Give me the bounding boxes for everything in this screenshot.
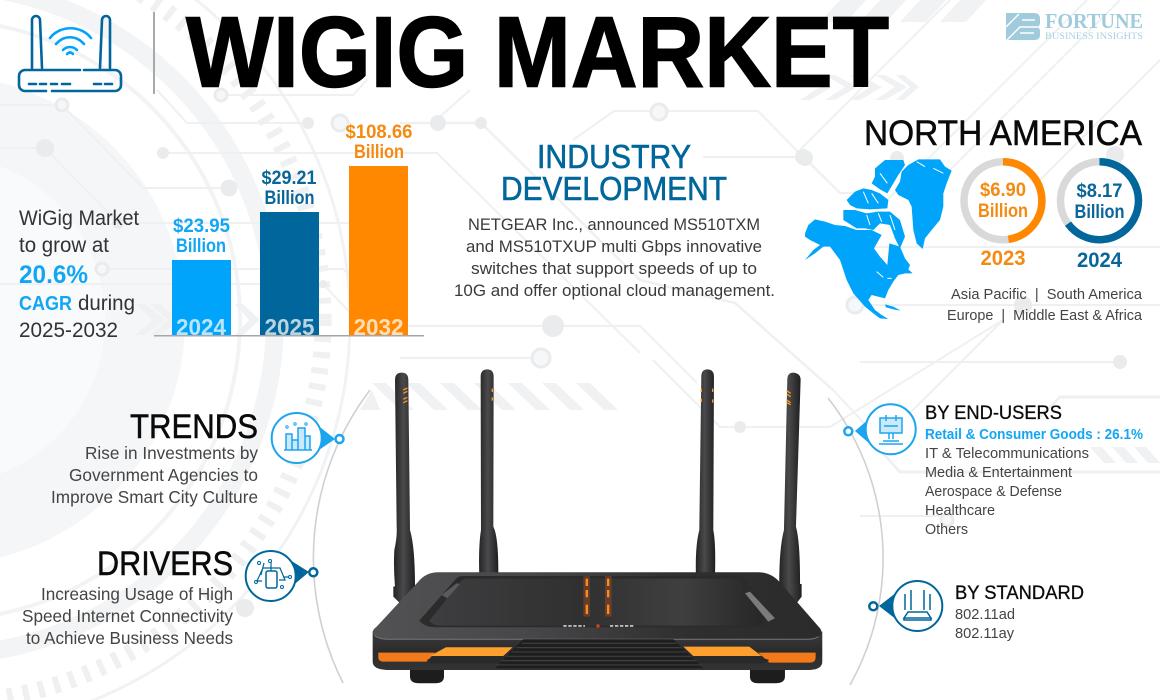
icon: router header (19, 16, 121, 91)
icon: router small (869, 581, 942, 631)
bar 2024: Billion (176, 236, 226, 257)
standard list: 802.11ad (955, 606, 1015, 623)
drivers heading: DRIVERS (97, 545, 233, 583)
other regions: Asia Pacific | South America (951, 287, 1143, 303)
map: North America (805, 159, 952, 319)
bar 2025: Billion (264, 188, 314, 209)
bar 2032 (346, 122, 412, 340)
chevron stripes (135, 75, 1160, 463)
logo: Fortune Business Insights: FORTUNE (1045, 9, 1143, 33)
icon: connected phone (246, 551, 317, 601)
orange glow strip (378, 653, 816, 663)
donut 2023 (964, 162, 1042, 270)
bar 2032: 2032 (354, 314, 404, 340)
donut 2024 (1060, 162, 1138, 272)
stripes (820, 0, 986, 22)
antennas (393, 369, 802, 603)
bar 2025: $29.21 (262, 168, 317, 189)
trends text: Rise in Investments by (85, 443, 258, 463)
segment list: Others (925, 521, 968, 538)
segment list: Healthcare (925, 502, 995, 519)
end-users heading: BY END-USERS (925, 402, 1062, 424)
router photo (373, 369, 822, 683)
industry development: NETGEAR Inc., announced MS510TXM (468, 216, 760, 234)
CAGR text block: WiGig Market (19, 207, 139, 230)
antenna leds (403, 388, 791, 405)
standard list: 802.11ay (955, 625, 1014, 642)
header divider (153, 12, 155, 94)
industry development: 10G and offer optional cloud management. (454, 282, 775, 300)
big arc lines (313, 390, 883, 685)
logo: Fortune Business Insights (1006, 9, 1143, 42)
trends text: Government Agencies to (69, 465, 258, 485)
industry development: and MS510TXUP multi Gbps innovative (466, 238, 762, 256)
dark trim (427, 657, 769, 663)
CAGR text block: during (78, 292, 135, 315)
drivers text (22, 584, 233, 648)
standard list (955, 606, 1015, 642)
CAGR text block: CAGR (19, 293, 72, 315)
bar 2025 (260, 168, 319, 340)
segment list (925, 445, 1089, 538)
segment list: Media & Entertainment (925, 464, 1073, 481)
bar 2032: Billion (354, 142, 404, 163)
router inner panel (419, 576, 775, 627)
CAGR text block: 20.6% (19, 261, 88, 289)
icon: monitor (844, 404, 916, 454)
bar 2032: $108.66 (346, 122, 412, 143)
industry development: switches that support speeds of up to (471, 260, 757, 278)
trends heading: TRENDS (130, 408, 258, 446)
feet (410, 668, 785, 683)
icon: smart city (272, 413, 344, 463)
segment list: Aerospace & Defense (925, 483, 1062, 500)
segment list: IT & Telecommunications (925, 445, 1089, 462)
donut 2024: 2024 (1077, 249, 1122, 272)
trends text (51, 443, 258, 507)
panel: drivers (22, 545, 317, 648)
industry development: INDUSTRY (537, 138, 691, 175)
donut 2023: 2023 (980, 247, 1026, 270)
logo: Fortune Business Insights: BUSINESS INSIGHTS (1045, 32, 1143, 42)
standard heading: BY STANDARD (955, 582, 1084, 604)
drivers text: Speed Internet Connectivity (22, 606, 233, 626)
bar 2024: $23.95 (173, 216, 230, 237)
north america heading: NORTH AMERICA (864, 114, 1143, 153)
drivers text: to Achieve Business Needs (26, 628, 233, 648)
trends text: Improve Smart City Culture (51, 487, 258, 507)
bar 2025: 2025 (264, 314, 315, 340)
CAGR text block: to grow at (19, 234, 109, 257)
orange tabs (430, 647, 762, 656)
donut 2023: $6.90 (980, 180, 1026, 201)
bar 2024: 2024 (176, 314, 226, 340)
highlighted segment: Retail & Consumer Goods : 26.1% (925, 427, 1143, 443)
other regions: Europe | Middle East & Africa (947, 308, 1143, 324)
drivers text: Increasing Usage of High (41, 584, 233, 604)
bar chart (154, 122, 424, 340)
led strips (583, 576, 612, 628)
panel: by end-users (844, 402, 1143, 538)
bar 2024 (172, 216, 231, 340)
donut 2024: $8.17 (1076, 181, 1122, 202)
CAGR text block: 2025-2032 (19, 319, 118, 342)
other regions (947, 287, 1143, 324)
panel: by standard (869, 581, 1084, 642)
industry development (454, 138, 775, 300)
CAGR text block (19, 207, 139, 342)
router front (373, 632, 822, 670)
donut 2023: Billion (978, 201, 1028, 222)
vents (495, 639, 703, 668)
router top (373, 572, 822, 639)
panel: trends (51, 408, 344, 507)
donut 2024: Billion (1074, 202, 1124, 223)
industry development: DEVELOPMENT (501, 170, 727, 207)
